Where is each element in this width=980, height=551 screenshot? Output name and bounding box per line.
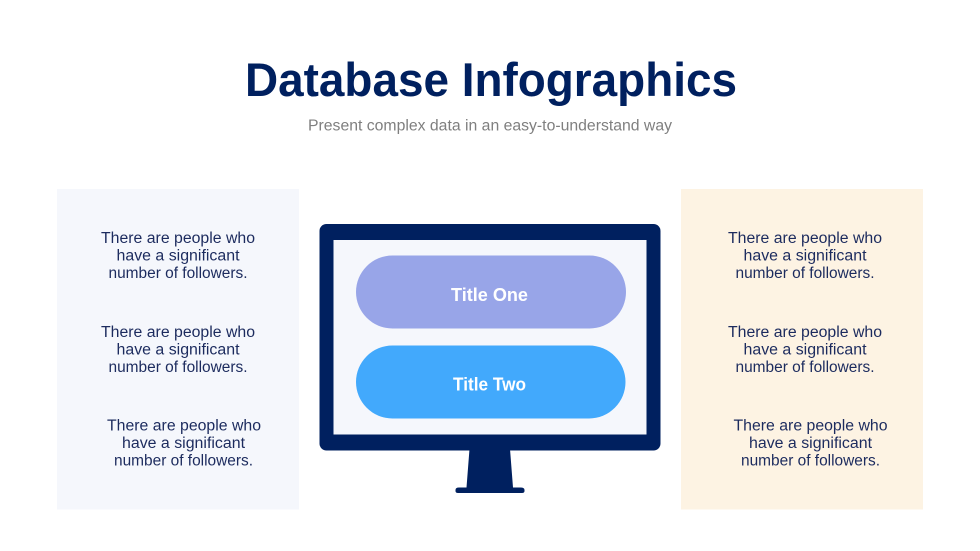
text block: right two: number of followers. [736,359,874,376]
text block: left three: There are people who [107,418,261,434]
text block: right three [734,418,888,470]
text block: left one [101,230,255,282]
text block: right one: have a significant [744,248,867,264]
text block: right three: number of followers. [741,452,880,470]
title: Database Infographics [245,53,737,106]
text block: right two: have a significant [744,342,867,358]
text block: right two [728,324,882,376]
panel: left [57,189,299,510]
text block: right two: There are people who [728,324,882,341]
subtitle: Present complex data in an easy-to-understand way [308,118,672,134]
pill: title one [356,256,626,328]
pill: title two: Title Two [453,374,526,394]
text block: left three: have a significant [122,435,246,452]
text block: right three: There are people who [734,418,888,434]
monitor frame [320,224,660,450]
text block: left two: have a significant [116,342,240,358]
text block: right three: have a significant [749,435,873,452]
text block: left two: number of followers. [108,359,248,376]
text block: left one: number of followers. [108,265,248,282]
pill: title one: Title One [451,284,528,305]
text block: left three: number of followers. [114,452,253,470]
text block: right one: number of followers. [736,265,874,282]
icon: computer monitor [320,224,660,493]
text block: right one: There are people who [728,230,882,247]
text block: left one: There are people who [101,230,255,247]
text block: left one: have a significant [116,248,240,264]
text block: right one [728,230,882,282]
monitor screen [334,240,646,434]
text block: left three [107,418,261,470]
text block: left two: There are people who [101,324,255,341]
panel: right [681,189,923,510]
pill: title two [356,346,626,418]
text block: left two [101,324,255,376]
monitor stand [456,449,524,493]
